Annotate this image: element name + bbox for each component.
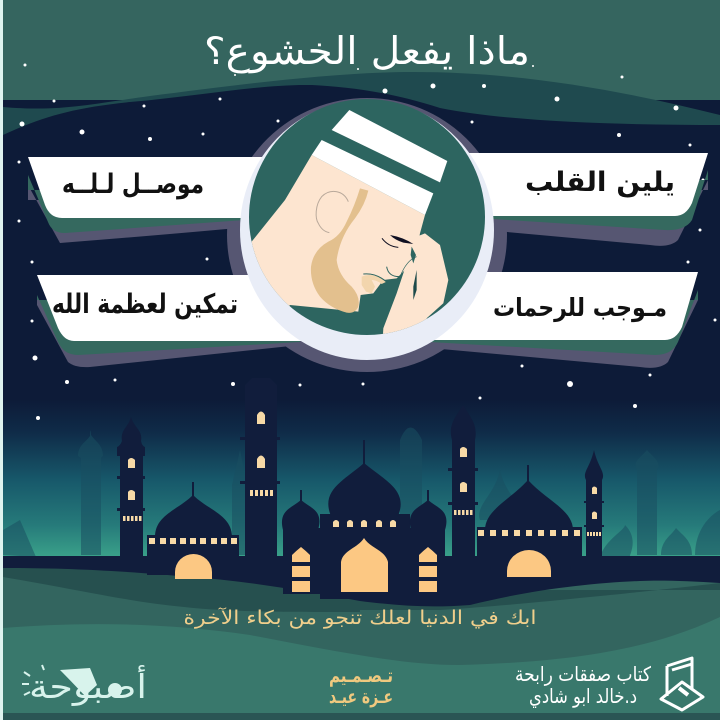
hills [3,556,720,720]
quote: ابك في الدنيا لعلك تنجو من بكاء الآخرة [184,607,536,629]
designer credit: تـصـمـيم [329,665,393,687]
portrait medallion [240,99,494,360]
icon: open book [661,658,703,710]
logo: asbuhiya: أصبوحة [29,665,147,706]
book credit [515,662,651,709]
back ring of the portrait [227,98,507,372]
skyline: distant mosques [3,428,720,557]
mosque silhouette [117,378,604,599]
stars [18,64,716,420]
figure: bowed head with hand [252,110,448,334]
designer credit [329,665,393,708]
banner: bottom left [37,275,320,367]
banner: bottom right [420,272,698,368]
banner text: يلين القلب [525,167,675,198]
banner text: مـوجب للرحمات [493,293,667,323]
banner: top right [420,153,708,246]
designer credit: عـزة عيـد [329,686,393,708]
banner text: موصــل لـلــه [62,169,204,200]
banner: top left [28,157,320,243]
book credit: د.خالد ابو شادي [529,684,637,709]
book credit: كتاب صفقات رابحة [515,662,651,686]
banner text: تمكين لعظمة الله [52,289,238,320]
title: ماذا يفعل الخشوع؟ [204,29,530,74]
mosque lit windows and doors [123,412,601,592]
